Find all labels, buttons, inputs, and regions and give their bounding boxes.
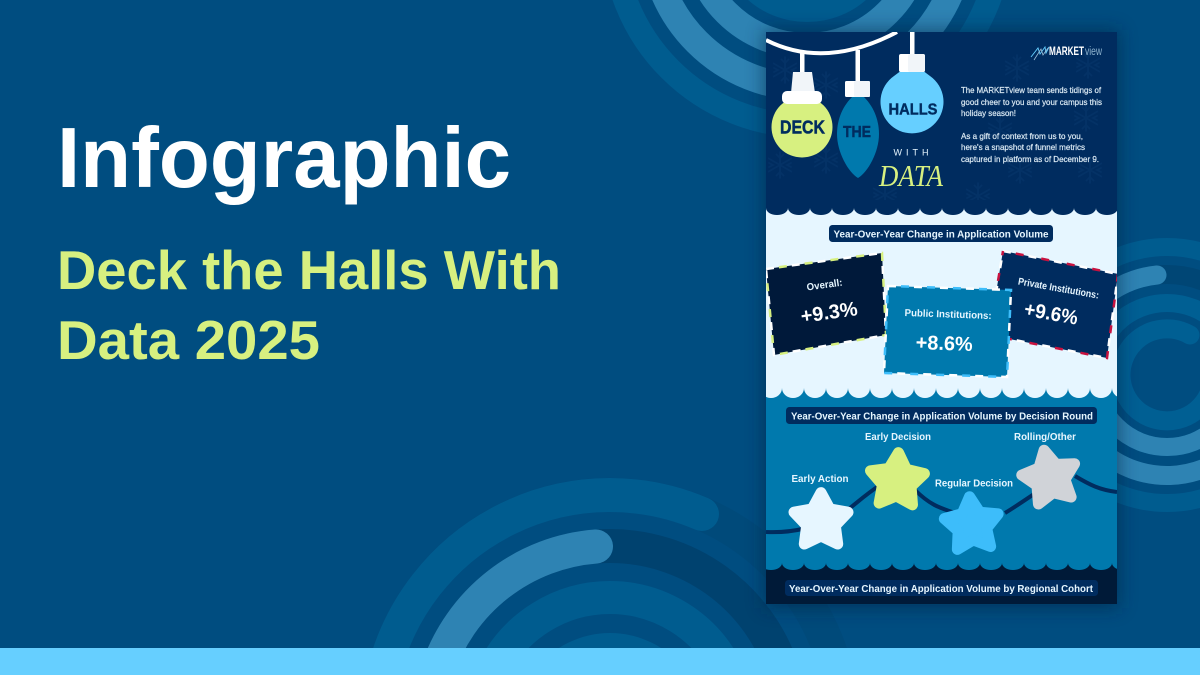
intro text: here's a snapshot of funnel metrics [961,143,1085,152]
title: Infographic [57,111,511,206]
card: public institutions: Public Institutions: [904,308,992,322]
subtitle [57,239,561,371]
section: regional cohort background [766,563,1117,604]
heading word: WITH: WITH [894,148,928,158]
intro text [961,86,1102,164]
ornament: HALLS: HALLS [888,102,938,118]
section: application volume background [766,208,1117,390]
card: private institutions [989,251,1118,358]
intro text: holiday season! [961,109,1016,118]
star: regular decision [935,478,1013,550]
subtitle: Data 2025 [57,309,320,371]
ornament: THE: THE [843,124,871,141]
string of lights wire [766,32,897,53]
star: early decision [865,432,931,505]
heading pill: application volume: Year-Over-Year Change in Application Volume [834,230,1049,240]
heading pill: regional cohort: Year-Over-Year Change in Application Volume by Regional Cohort [789,584,1094,595]
card: overall [766,253,886,355]
card: public institutions: +8.6% [915,332,973,356]
snowflake pattern [769,52,1101,209]
logo: MARKETview: MARKET [1049,46,1084,58]
decorative rings: bottom centre [384,495,836,670]
card: private institutions: +9.6% [1023,299,1080,330]
ornament: HALLS [880,32,944,133]
garland line [766,476,1117,532]
logo: MARKETview [1031,46,1103,60]
star: rolling/other: Rolling/Other [1014,432,1076,443]
logo: MARKETview: view [1085,46,1103,58]
subtitle: Deck the Halls With [57,239,561,301]
section: decision round background [766,388,1117,568]
heading word: DATA: DATA [878,158,944,193]
bottom bar [0,648,1200,675]
scalloped divider: light to teal [766,388,1117,398]
infographic panel [760,32,1134,604]
heading pill: decision round: Year-Over-Year Change in Application Volume by Decision Round [791,412,1093,422]
heading pill: regional cohort [785,580,1098,596]
ornament: THE [837,50,879,178]
intro text: good cheer to you and your campus this [961,98,1102,107]
intro text: The MARKETview team sends tidings of [961,86,1102,95]
card: overall: Overall: [806,278,843,293]
decorative rings: top [613,0,1001,126]
panel shadow [764,30,1119,608]
heading pill: application volume [829,225,1053,242]
scalloped divider: navy to light [766,208,1117,215]
star: regular decision: Regular Decision [935,478,1013,490]
card: private institutions: Private Institutions: [1017,277,1100,302]
ornament: DECK [772,52,832,158]
intro text: captured in platform as of December 9. [961,155,1099,164]
card: public institutions [884,286,1011,377]
star: early action [792,474,848,544]
ornament: DECK: DECK [780,118,825,138]
scalloped divider: teal to dark [766,563,1117,570]
star: rolling/other [1014,432,1081,506]
heading pill: decision round [786,407,1097,424]
star: early decision: Early Decision [865,432,931,443]
intro text: As a gift of context from us to you, [961,132,1083,141]
card: overall: +9.3% [799,298,859,328]
decorative rings: right [1039,247,1200,503]
star: early action: Early Action [792,474,848,485]
